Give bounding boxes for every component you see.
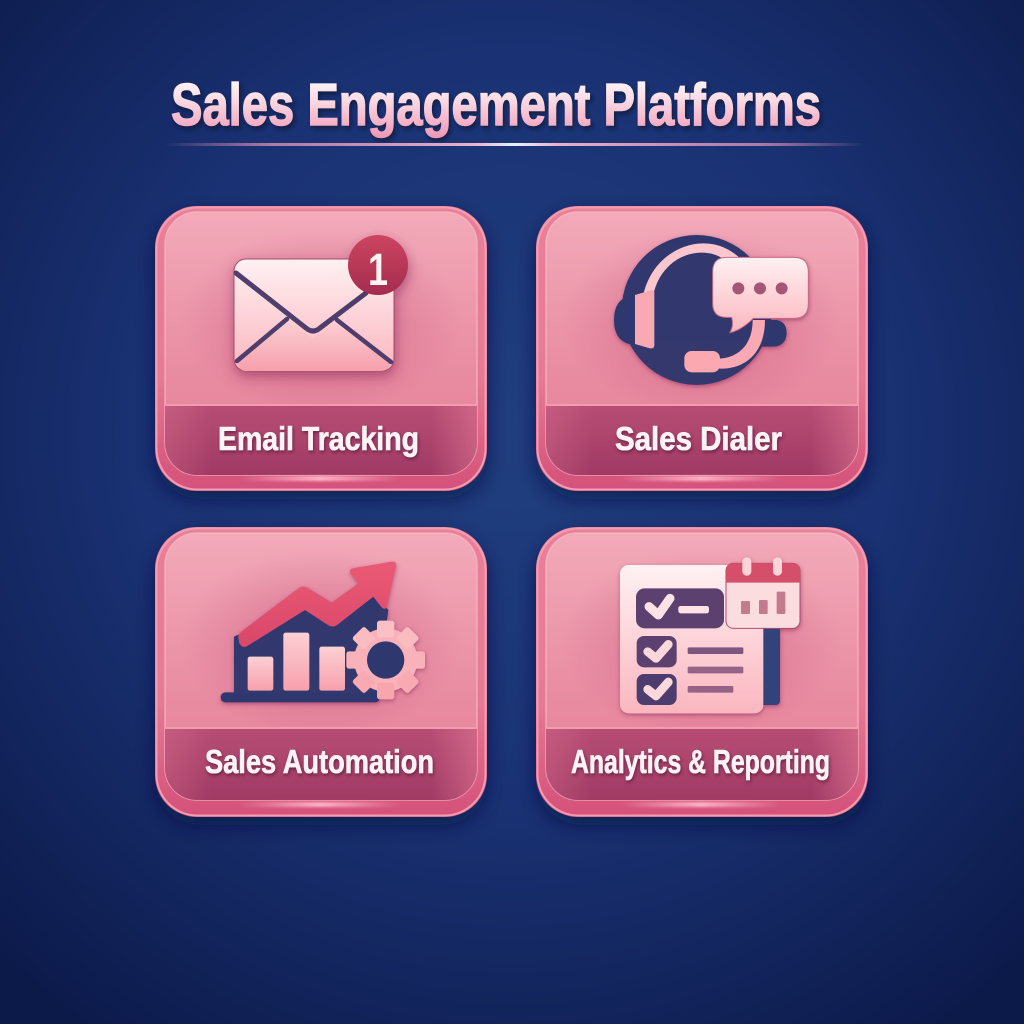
panel: Sales Automation <box>155 527 487 817</box>
card frame <box>536 206 868 491</box>
calendar <box>726 557 800 628</box>
card frame <box>536 527 868 817</box>
label: Sales Automation <box>205 743 434 780</box>
icon: checklist with calendar <box>620 557 800 713</box>
panel: Email Tracking <box>155 206 487 491</box>
notification badge: 1 <box>368 244 388 295</box>
icon: growth chart with gear <box>221 562 425 702</box>
card frame <box>155 206 487 491</box>
icon: headset with speech bubble <box>614 235 808 385</box>
card frame <box>155 527 487 817</box>
icon: envelope with notification badge <box>234 235 408 371</box>
label: Sales Dialer <box>615 420 782 457</box>
panel: Analytics & Reporting <box>536 527 868 817</box>
panel: Sales Dialer <box>536 206 868 491</box>
gear <box>346 621 425 699</box>
label: Analytics & Reporting <box>571 743 830 780</box>
title: Sales Engagement Platforms <box>171 72 821 138</box>
notification badge <box>348 235 408 295</box>
label: Email Tracking <box>218 420 419 457</box>
title underline <box>165 143 865 146</box>
